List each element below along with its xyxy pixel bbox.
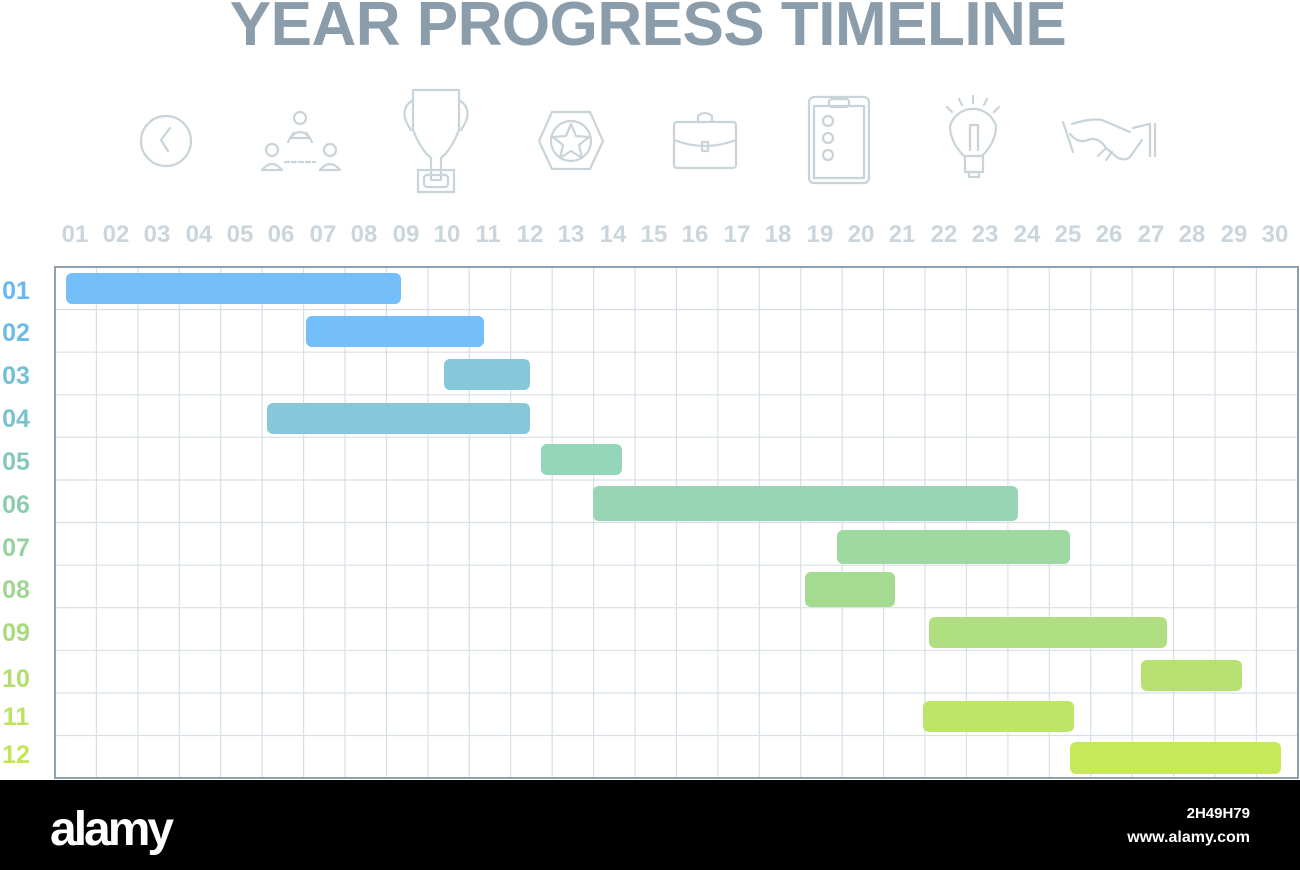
row labels: 11 [3,703,29,731]
icons row [141,90,1155,192]
column labels: 24 [1014,221,1041,248]
row labels: 12 [2,741,30,769]
column labels: 04 [186,221,213,248]
column labels: 26 [1096,221,1122,248]
column labels: 18 [765,221,791,248]
icon: light bulb [947,96,999,177]
footer bar: 2H49H79 [1187,805,1250,822]
column labels: 23 [972,221,998,248]
row labels: 04 [2,405,30,433]
icon: team network [262,112,340,170]
icon: trophy [404,90,468,192]
column labels: 30 [1262,221,1288,248]
row labels: 07 [2,534,30,562]
column labels: 13 [558,221,584,248]
row labels: 01 [2,277,30,305]
row labels [2,277,30,769]
column labels: 03 [144,221,170,248]
icon: briefcase [674,113,736,168]
column labels: 28 [1179,221,1205,248]
column labels: 16 [682,221,708,248]
row labels: 06 [2,491,30,519]
column labels: 05 [227,221,253,248]
column labels: 11 [475,221,501,248]
column labels: 10 [434,221,460,248]
footer bar [0,780,1300,870]
column labels: 21 [889,221,915,248]
row labels: 03 [2,362,30,390]
icon: handshake [1063,120,1155,160]
row labels: 05 [2,448,30,476]
footer bar: alamy [50,803,174,856]
column labels: 12 [517,221,543,248]
row labels: 10 [2,665,30,693]
icon: clipboard [809,97,869,183]
column labels: 22 [931,221,957,248]
column labels [62,221,1288,248]
column labels: 20 [848,221,874,248]
column labels: 15 [641,221,667,248]
row labels: 09 [2,619,30,647]
column labels: 01 [62,221,88,248]
column labels: 25 [1055,221,1081,248]
column labels: 29 [1221,221,1247,248]
icon: star badge [539,112,603,169]
footer bar: www.alamy.com [1126,829,1250,846]
column labels: 06 [268,221,294,248]
grid chart [55,267,1298,778]
bars [66,273,401,304]
column labels: 19 [807,221,833,248]
column labels: 09 [393,221,419,248]
icon: clock [141,116,191,166]
column labels: 07 [310,221,336,248]
row labels: 08 [2,576,30,604]
column labels: 02 [103,221,129,248]
column labels: 08 [351,221,377,248]
column labels: 14 [600,221,627,248]
column labels: 27 [1138,221,1164,248]
row labels: 02 [2,319,30,347]
column labels: 17 [724,221,750,248]
